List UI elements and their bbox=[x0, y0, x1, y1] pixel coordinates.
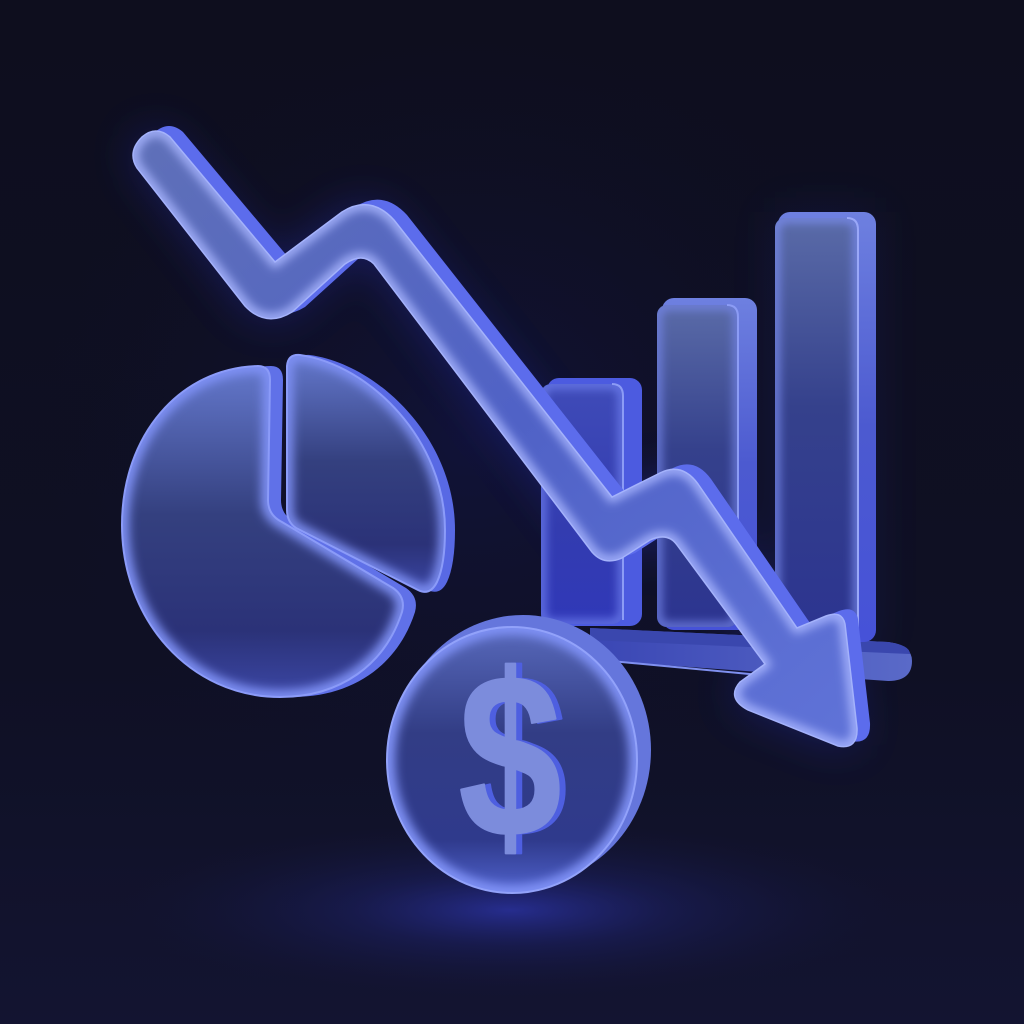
dollar sign shadow: $ bbox=[465, 627, 567, 886]
ambient glow behind objects bbox=[133, 131, 875, 747]
pie slice: small bbox=[287, 355, 455, 592]
pie slice: large bbox=[122, 366, 416, 697]
bar chart bbox=[541, 212, 912, 681]
dollar sign: $ bbox=[459, 627, 561, 886]
bar: short bbox=[541, 378, 642, 626]
downward trend arrow bbox=[133, 126, 870, 747]
floor glow bbox=[120, 820, 900, 1000]
dollar coin bbox=[387, 615, 651, 893]
bar: tall bbox=[775, 212, 876, 642]
central background glow bbox=[40, 40, 900, 840]
bar: medium bbox=[657, 298, 757, 630]
base plate bbox=[590, 628, 912, 681]
pie chart bbox=[122, 355, 455, 697]
